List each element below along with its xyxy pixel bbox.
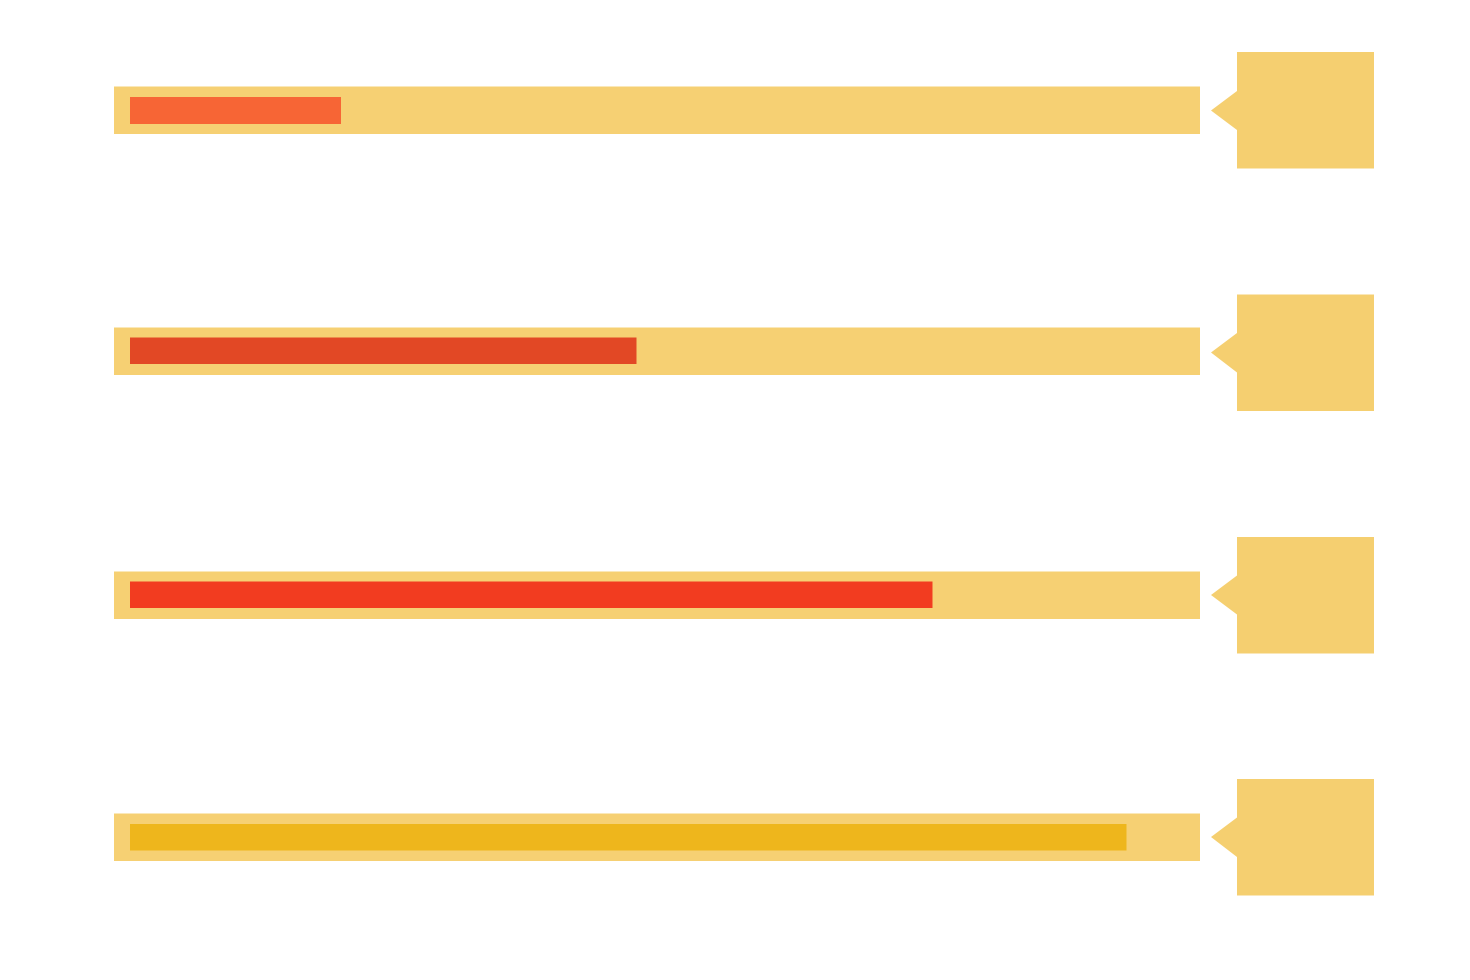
progress row 2 (114, 294, 1374, 411)
bar track 1 (114, 86, 1200, 134)
bar fill 3 (130, 582, 932, 608)
bar track 4 (114, 814, 1200, 861)
callout 2 (1211, 294, 1374, 411)
bar fill 1 (130, 97, 341, 124)
bar fill 4 (130, 824, 1126, 850)
progress row 1 (114, 52, 1374, 168)
callout 4 (1211, 779, 1374, 896)
callout 3 (1211, 537, 1374, 654)
bar track 3 (114, 572, 1200, 619)
callout 1 (1211, 52, 1374, 168)
progress row 4 (114, 779, 1374, 896)
bar track 2 (114, 328, 1200, 375)
bar fill 2 (130, 338, 636, 364)
progress row 3 (114, 537, 1374, 654)
